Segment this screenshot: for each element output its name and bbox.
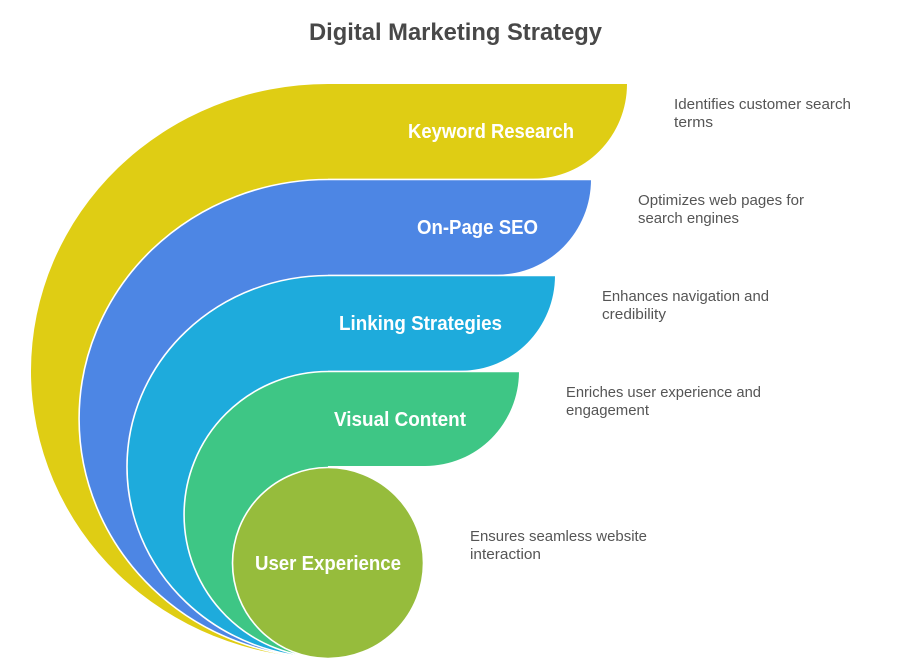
text block: visual content description	[566, 385, 761, 419]
panel: keyword research: Keyword Research	[408, 121, 574, 143]
text block: on-page seo description: search engines	[638, 211, 739, 227]
text block: visual content description: engagement	[566, 403, 649, 419]
text block: keyword research description	[674, 97, 851, 131]
text block: linking strategies description: Enhances navigation and	[602, 289, 769, 305]
text block: keyword research description: terms	[674, 115, 713, 131]
text block: user experience description	[470, 529, 647, 563]
panel: user experience: User Experience	[255, 553, 401, 575]
text block: user experience description: Ensures seamless website	[470, 529, 647, 545]
panel: on-page seo: On-Page SEO	[417, 217, 538, 239]
text block: on-page seo description	[638, 193, 804, 227]
panel: linking strategies	[127, 276, 555, 658]
text block: keyword research description: Identifies customer search	[674, 97, 851, 113]
text block: linking strategies description	[602, 289, 769, 323]
text block: user experience description: interaction	[470, 547, 541, 563]
funnel diagram	[31, 84, 627, 658]
text block: visual content description: Enriches user experience and	[566, 385, 761, 401]
panel: linking strategies: Linking Strategies	[339, 313, 502, 335]
panel: visual content	[184, 372, 519, 658]
panel: visual content: Visual Content	[334, 409, 466, 431]
panel: user experience	[232, 468, 424, 658]
title: Digital Marketing Strategy	[309, 19, 603, 46]
text block: on-page seo description: Optimizes web pages for	[638, 193, 804, 209]
text block: linking strategies description: credibility	[602, 307, 667, 323]
